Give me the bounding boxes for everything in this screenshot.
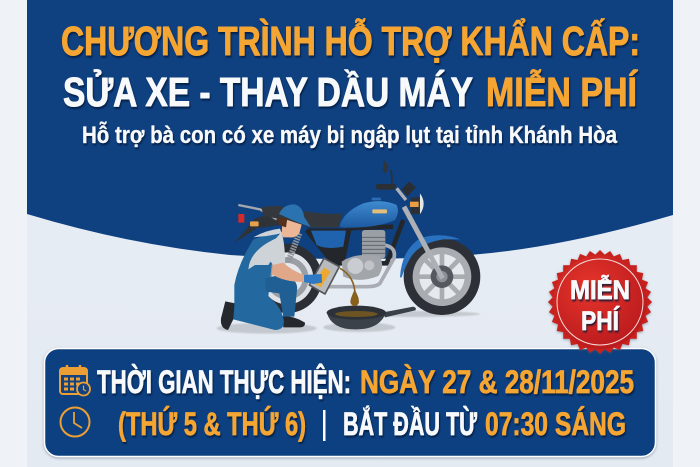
headlight — [410, 193, 424, 214]
overalls front leg — [265, 274, 297, 317]
front boot — [283, 316, 305, 327]
frame — [307, 220, 403, 265]
badge text line 1: MIỄN — [570, 274, 630, 305]
front wheel — [404, 238, 480, 315]
oil jug — [309, 258, 339, 294]
panel: event schedule — [44, 348, 656, 456]
badge text line 2: PHÍ — [581, 305, 620, 336]
icon: clock — [60, 408, 90, 436]
line 2 start time: 07:30 SÁNG — [485, 406, 626, 442]
icon: calendar with clock — [60, 365, 90, 396]
line 1 date: NGÀY 27 & 28/11/2025 — [360, 364, 634, 400]
shirt — [248, 232, 285, 269]
badge: miễn phí — [548, 250, 652, 354]
arm — [272, 263, 305, 282]
title: heading lines — [61, 17, 640, 115]
rear fender and tail light — [235, 205, 280, 243]
title line 2 white: SỬA XE - THAY DẦU MÁY — [63, 69, 473, 115]
blue curved header background — [27, 0, 673, 259]
seat — [262, 206, 343, 227]
head — [282, 218, 302, 237]
engine fins — [362, 230, 385, 258]
rear wheel — [253, 244, 322, 313]
oil pan — [327, 306, 416, 329]
overalls torso and rear leg — [233, 233, 284, 330]
exhaust pipe — [328, 245, 394, 287]
mechanic — [221, 204, 339, 330]
cap — [279, 204, 311, 227]
shoulder — [253, 229, 282, 237]
shock absorber — [288, 233, 299, 262]
hair — [277, 218, 287, 227]
fuel tank — [339, 198, 398, 228]
starburst seal — [548, 250, 652, 354]
front fender — [400, 235, 461, 277]
line 1 label: THỜI GIAN THỰC HIỆN: — [97, 364, 351, 400]
rear boot — [221, 301, 235, 330]
handlebar and mirror — [376, 160, 416, 197]
title line 2 highlight: MIỄN PHÍ — [486, 69, 638, 115]
line 2 separator — [323, 410, 326, 441]
illustration: mechanic changing motorcycle oil — [217, 160, 480, 334]
line 2 weekdays: (THỨ 5 & THỨ 6) — [118, 406, 306, 442]
ground shadows — [217, 311, 480, 334]
glove — [304, 274, 322, 284]
schedule box — [44, 348, 656, 456]
fork — [404, 207, 443, 278]
seal face — [553, 255, 647, 349]
engine block — [342, 255, 382, 280]
seal ring — [557, 259, 643, 345]
oil stream — [340, 268, 359, 306]
line 2 start label: BẮT ĐẦU TỪ — [343, 406, 477, 442]
side cover — [311, 231, 346, 248]
motorcycle — [235, 160, 480, 315]
